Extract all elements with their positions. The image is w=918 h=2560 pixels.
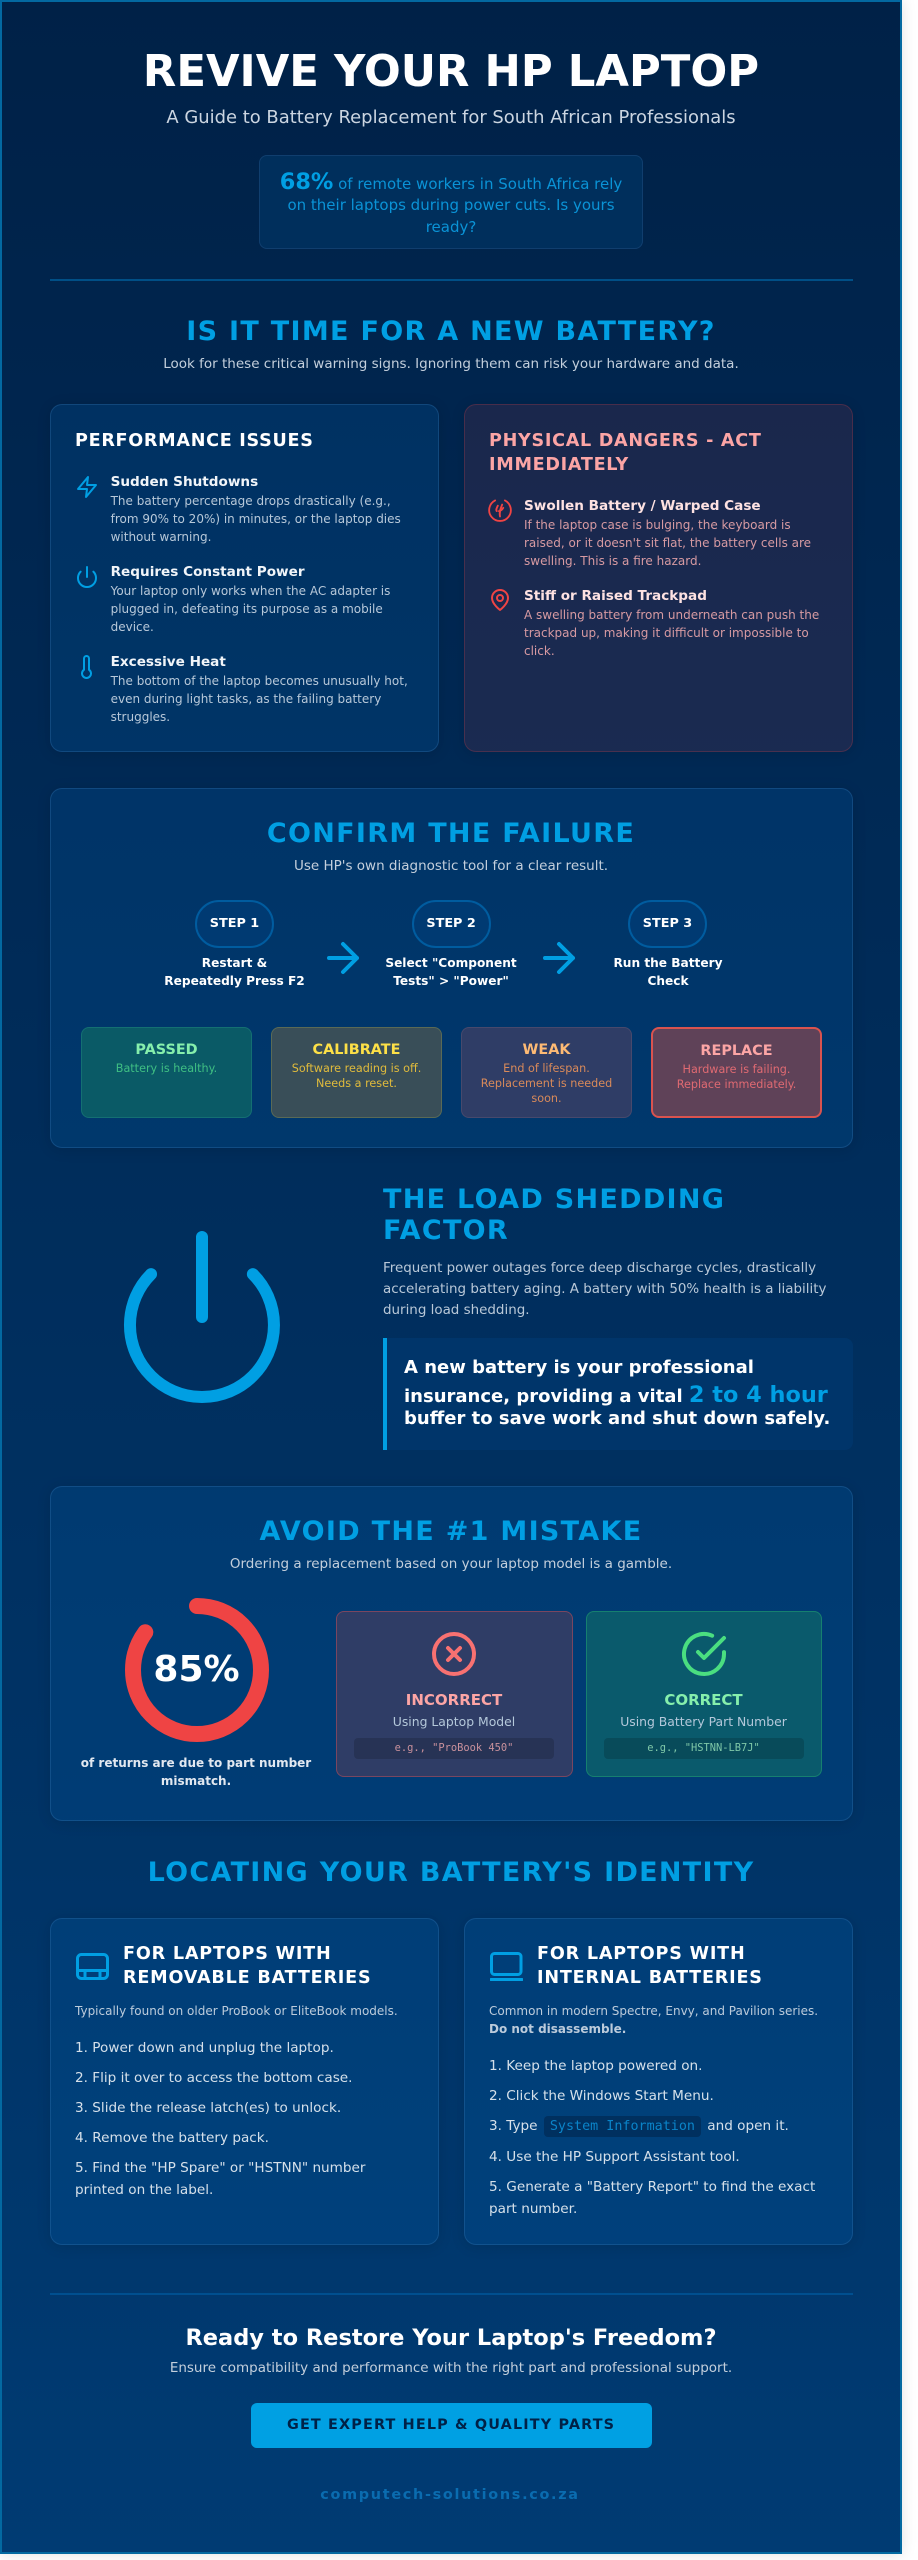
card description: Do not disassemble.: [489, 2022, 626, 2036]
item: stiff trackpad: Stiff or Raised Trackpad: [524, 588, 707, 604]
heading: load shedding factor: FACTOR: [383, 1215, 509, 1246]
callout: professional insurance: A new battery is your professional: [404, 1357, 754, 1378]
item: swollen battery: raised, or it doesn't sit flat, the battery cells are: [524, 536, 811, 550]
button: GET EXPERT HELP & QUALITY PARTS: [287, 2417, 615, 2433]
step 2 label: [385, 956, 517, 988]
card: correct: [586, 1611, 822, 1777]
panel: performance issues: [50, 404, 438, 752]
card: correct: e.g., "HSTNN-LB7J": [647, 1742, 760, 1754]
warning signs subheading: Look for these critical warning signs. Ignoring them can risk your hardware and data.: [163, 356, 739, 372]
item: requires constant power: Your laptop only works when the AC adapter is: [111, 584, 390, 598]
item: stiff trackpad: [524, 588, 819, 658]
internal steps: [489, 2058, 815, 2217]
item: swollen battery: swelling. This is a fire hazard.: [524, 554, 701, 568]
panel: removable batteries: [50, 1918, 438, 2245]
item: stiff trackpad: click.: [524, 644, 555, 658]
icon: power: [77, 566, 97, 588]
card: incorrect: INCORRECT: [406, 1691, 502, 1709]
icon: swollen battery: [488, 500, 512, 522]
internal steps: part number.: [489, 2201, 577, 2217]
removal steps: 3. Slide the release latch(es) to unlock.: [75, 2100, 341, 2116]
result: replace: Replace immediately.: [677, 1078, 796, 1091]
icon: laptop underside: [76, 1953, 109, 1980]
step 1 label: [164, 956, 305, 988]
card title: [537, 1944, 763, 1988]
item: sudden shutdowns: [110, 474, 401, 544]
card: incorrect: [336, 1611, 572, 1777]
item: requires constant power: device.: [111, 620, 154, 634]
internal steps: 5. Generate a "Battery Report" to find the exact: [489, 2179, 815, 2195]
donut chart: 85%: 85%: [153, 1649, 240, 1690]
callout: professional insurance: buffer to save work and shut down safely.: [404, 1408, 830, 1429]
panel: physical dangers: [464, 404, 852, 752]
step 2: [412, 900, 491, 948]
step 3: [628, 900, 707, 948]
heading: CONFIRM THE FAILURE: [267, 818, 635, 849]
item: excessive heat: The bottom of the laptop becomes unusually hot,: [111, 674, 408, 688]
internal steps: 3. Type System Information and open it.: [489, 2118, 789, 2134]
step 1 label: Restart &: [202, 956, 267, 970]
subheading: Use HP's own diagnostic tool for a clear result.: [294, 858, 608, 874]
result: calibrate: [271, 1027, 442, 1118]
result: replace: REPLACE: [700, 1043, 773, 1059]
result: calibrate: CALIBRATE: [313, 1042, 400, 1058]
removal steps: 1. Power down and unplug the laptop.: [75, 2040, 334, 2056]
donut caption: mismatch.: [161, 1774, 231, 1788]
arrow: [543, 942, 576, 974]
subtitle: A Guide to Battery Replacement for South African Professionals: [166, 107, 736, 128]
donut chart: 85%: [125, 1598, 269, 1742]
removal steps: [75, 2040, 366, 2198]
callout: 68% statistic: [259, 155, 643, 249]
card title: FOR LAPTOPS WITH: [123, 1944, 332, 1964]
callout: 68% statistic: on their laptops during power cuts. Is yours: [287, 196, 615, 214]
callout: 68% statistic: ready?: [426, 218, 476, 236]
icon: map pin: [491, 589, 509, 611]
card title: FOR LAPTOPS WITH: [537, 1944, 746, 1964]
panel title: PERFORMANCE ISSUES: [75, 431, 314, 451]
result: passed: Battery is healthy.: [116, 1062, 217, 1075]
card: correct: CORRECT: [664, 1691, 743, 1709]
arrow: [327, 942, 360, 974]
title: REVIVE YOUR HP LAPTOP: [143, 47, 759, 97]
icon: laptop: [490, 1952, 523, 1981]
result: replace: [651, 1027, 822, 1118]
item: excessive heat: [110, 654, 408, 724]
panel title: IMMEDIATELY: [489, 455, 629, 475]
step 3 label: Check: [647, 974, 689, 988]
card description: Typically found on older ProBook or EliteBook models.: [75, 2004, 398, 2018]
icon: lightning bolt: [77, 476, 97, 498]
panel: avoid the #1 mistake: [50, 1486, 852, 1821]
callout: professional insurance: [383, 1338, 853, 1450]
step 1: [195, 900, 274, 948]
heading: warning signs: IS IT TIME FOR A NEW BATTERY?: [186, 316, 716, 347]
callout: 68% statistic: 68% of remote workers in South Africa rely: [280, 169, 622, 195]
panel: confirm the failure: [50, 788, 852, 1148]
step 3 label: [613, 956, 723, 988]
card description: Common in modern Spectre, Envy, and Pavilion series.: [489, 2004, 818, 2018]
item: excessive heat: Excessive Heat: [111, 654, 226, 670]
call to action heading: Ready to Restore Your Laptop's Freedom?: [185, 2325, 717, 2351]
step 2 label: Select "Component: [385, 956, 517, 970]
removal steps: 4. Remove the battery pack.: [75, 2130, 269, 2146]
result: weak: [461, 1027, 632, 1118]
panel title: PHYSICAL DANGERS - ACT: [489, 431, 762, 451]
item: stiff trackpad: trackpad up, making it difficult or impossible to: [524, 626, 809, 640]
icon: check circle: [682, 1632, 726, 1676]
load shedding text: during load shedding.: [383, 1302, 530, 1318]
result: calibrate: Software reading is off.: [292, 1062, 421, 1075]
result: weak: Replacement is needed: [481, 1077, 612, 1090]
callout: professional insurance: insurance, providing a vital 2 to 4 hour: [404, 1382, 828, 1408]
item: swollen battery: [524, 498, 811, 568]
internal steps: 1. Keep the laptop powered on.: [489, 2058, 702, 2074]
removal steps: 2. Flip it over to access the bottom case.: [75, 2070, 352, 2086]
panel: internal batteries: [464, 1918, 852, 2245]
card title: INTERNAL BATTERIES: [537, 1968, 763, 1988]
heading: load shedding factor: [383, 1184, 725, 1246]
donut caption: of returns are due to part number: [81, 1756, 311, 1770]
load shedding text: accelerating battery aging. A battery with 50% health is a liability: [383, 1282, 826, 1296]
result: replace: Hardware is failing.: [683, 1063, 790, 1076]
icon: large power symbol: [124, 1231, 280, 1403]
step 3 label: Run the Battery: [613, 956, 723, 970]
result: weak: WEAK: [522, 1042, 570, 1058]
removal steps: printed on the label.: [75, 2182, 213, 2198]
item: requires constant power: [110, 564, 390, 634]
item: requires constant power: plugged in, defeating its purpose as a mobile: [111, 602, 383, 616]
step 3: STEP 3: [643, 916, 692, 931]
item: requires constant power: Requires Constant Power: [111, 564, 305, 580]
step 2 label: Tests" > "Power": [393, 974, 509, 988]
call to action text: Ensure compatibility and performance with the right part and professional support.: [170, 2360, 732, 2376]
removal steps: 5. Find the "HP Spare" or "HSTNN" number: [75, 2160, 366, 2176]
heading: AVOID THE #1 MISTAKE: [260, 1516, 642, 1547]
icon: x circle: [432, 1632, 476, 1676]
card: incorrect: Using Laptop Model: [393, 1714, 515, 1729]
item: excessive heat: struggles.: [111, 710, 170, 724]
internal steps: 4. Use the HP Support Assistant tool.: [489, 2149, 740, 2165]
item: excessive heat: even during light tasks, as the failing battery: [111, 692, 381, 706]
icon: thermometer: [81, 655, 92, 679]
result: weak: End of lifespan.: [503, 1062, 590, 1075]
item: sudden shutdowns: from 90% to 20%) in minutes, or the laptop dies: [111, 512, 401, 526]
result: passed: PASSED: [135, 1042, 198, 1058]
heading: locating your battery's identity: LOCATING YOUR BATTERY'S IDENTITY: [148, 1857, 754, 1888]
item: sudden shutdowns: The battery percentage drops drastically (e.g.,: [111, 494, 391, 508]
step 1 label: Repeatedly Press F2: [164, 974, 305, 988]
result: passed: [81, 1027, 252, 1118]
subheading: Ordering a replacement based on your laptop model is a gamble.: [230, 1556, 672, 1572]
card: correct: Using Battery Part Number: [620, 1714, 787, 1729]
internal steps: 2. Click the Windows Start Menu.: [489, 2088, 714, 2104]
heading: load shedding factor: THE LOAD SHEDDING: [383, 1184, 725, 1215]
item: swollen battery: Swollen Battery / Warped Case: [524, 498, 761, 514]
card title: REMOVABLE BATTERIES: [123, 1968, 371, 1988]
card: incorrect: e.g., "ProBook 450": [395, 1742, 513, 1754]
card description: [489, 2004, 818, 2036]
item: swollen battery: If the laptop case is bulging, the keyboard is: [524, 518, 791, 532]
load shedding text: Frequent power outages force deep discharge cycles, drastically: [383, 1260, 816, 1276]
step 2: STEP 2: [426, 916, 476, 931]
result: weak: soon.: [531, 1092, 562, 1105]
card title: [123, 1944, 371, 1988]
step 1: STEP 1: [210, 916, 259, 931]
item: stiff trackpad: A swelling battery from underneath can push the: [524, 608, 819, 622]
button: [251, 2403, 652, 2448]
item: sudden shutdowns: without warning.: [111, 530, 211, 544]
donut caption: [81, 1756, 312, 1788]
panel title: [489, 431, 762, 475]
footer link: computech-solutions.co.za: [320, 2487, 580, 2503]
load shedding text: [383, 1260, 826, 1318]
result: calibrate: Needs a reset.: [316, 1077, 397, 1090]
item: sudden shutdowns: Sudden Shutdowns: [111, 474, 258, 490]
